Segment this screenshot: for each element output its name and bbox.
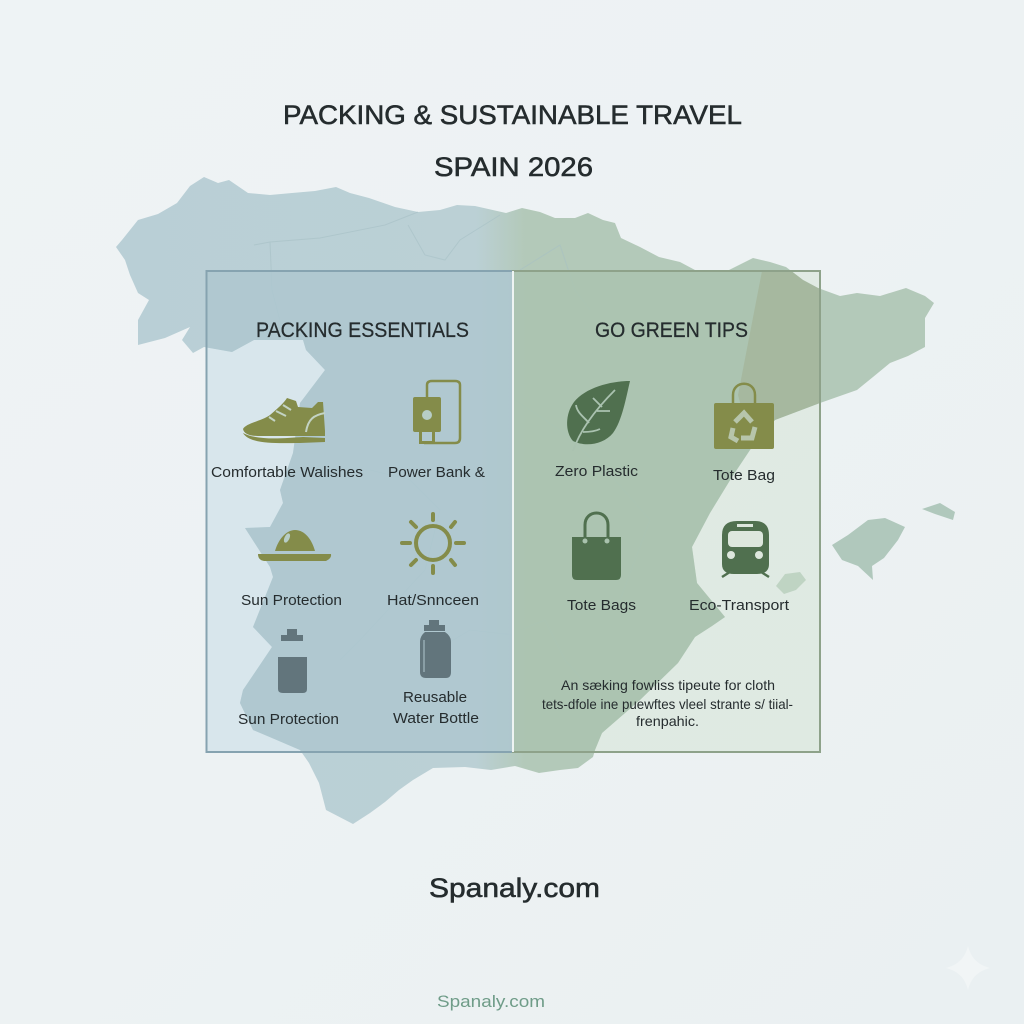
text block: tips paragraph: frenpahic.	[636, 713, 699, 729]
icon: train	[722, 521, 769, 577]
map regional borders	[254, 212, 650, 700]
icon: recycling tote bag	[714, 384, 774, 449]
label: reusable water bottle: Reusable	[403, 689, 467, 706]
label: tote bag: Tote Bag	[713, 467, 775, 484]
text block: tips paragraph: An sæking fowliss tipeute for cloth	[561, 677, 775, 693]
icon: shoe	[243, 398, 325, 443]
panel: packing essentials	[206, 271, 513, 752]
map of Spain	[116, 177, 934, 824]
heading: go green tips: GO GREEN TIPS	[595, 319, 748, 342]
label: zero plastic: Zero Plastic	[555, 463, 639, 480]
text block: tips paragraph: tets-dfole ine puewftes vleel strante s/ tiial-	[542, 696, 793, 712]
island: Mallorca	[832, 518, 905, 580]
icon: power bank	[413, 381, 460, 444]
title	[283, 100, 742, 182]
icon: tote bag	[572, 513, 621, 580]
website name: Spanaly.com	[429, 873, 600, 903]
title: SPAIN 2026	[434, 152, 593, 182]
label: tote bags: Tote Bags	[567, 597, 636, 614]
icon: hat	[258, 530, 331, 561]
label: sun protection: Sun Protection	[241, 592, 342, 609]
label: power bank: Power Bank &	[388, 464, 485, 481]
title: PACKING & SUSTAINABLE TRAVEL	[283, 100, 742, 130]
icon: leaf	[567, 381, 630, 451]
icon: sun	[402, 514, 464, 573]
icon: bottle without neck	[278, 629, 307, 693]
heading: packing essentials: PACKING ESSENTIALS	[256, 319, 469, 342]
panel: go green tips	[513, 271, 820, 752]
icon: reusable water bottle	[420, 620, 451, 678]
island: Ibiza	[776, 572, 806, 594]
infographic canvas	[116, 105, 955, 1010]
island: Menorca	[922, 503, 955, 520]
label: reusable water bottle	[393, 689, 479, 727]
footer link: Spanaly.com	[437, 992, 545, 1011]
icon: sparkle	[946, 946, 990, 990]
label: hat/sunscreen: Hat/Snnceen	[387, 592, 479, 609]
label: comfortable walishes: Comfortable Walishes	[211, 464, 363, 481]
label: eco-transport: Eco-Transport	[689, 597, 790, 614]
label: sun protection 2: Sun Protection	[238, 711, 339, 728]
text block: tips paragraph	[542, 677, 793, 729]
label: reusable water bottle: Water Bottle	[393, 710, 479, 727]
